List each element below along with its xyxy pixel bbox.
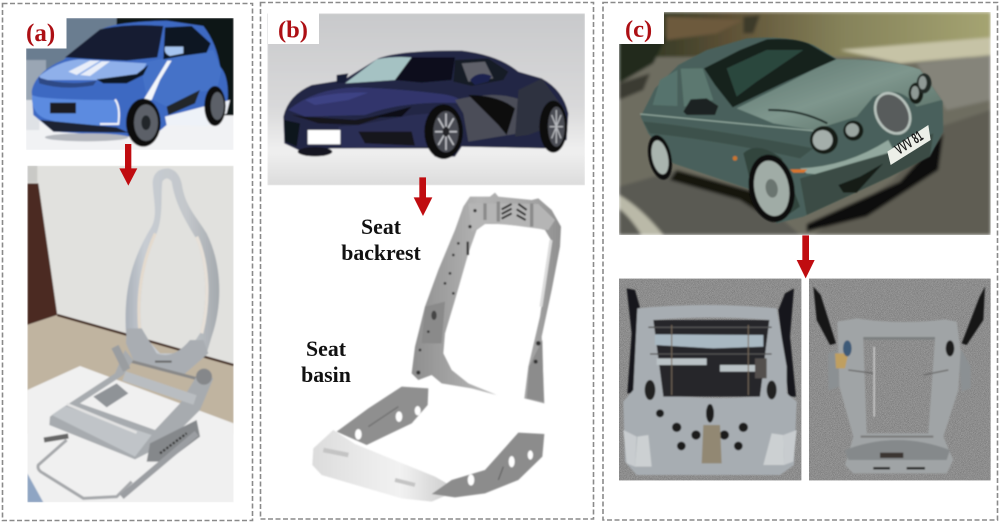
photo: cast seat frame, left view [619,279,801,480]
photo: dark blue sports car [267,13,585,185]
number plate text: VVV 81 [892,128,926,158]
label (b) [268,13,319,44]
label: seat backrest: Seat [361,215,402,239]
label (b): (b) [278,16,308,44]
arrow: car to seat frame (b) [414,177,432,216]
label: seat basin: basin [301,363,351,387]
label: seat basin: Seat [306,337,347,361]
photo: cast seat frame, right view [809,279,991,480]
panel (a): compact electric car and its seat frame [2,4,252,520]
label (c): (c) [625,16,652,43]
label (a): (a) [26,20,55,47]
label: seat backrest: backrest [341,241,421,265]
label (a) [26,18,66,48]
seat basin part [312,387,544,502]
arrow: car to seat frames (c) [797,235,815,278]
panel (b): sports car and seat frame parts [260,2,594,519]
photo: blue electric city car [26,18,234,150]
photo: green sedan on road [619,12,991,235]
label (c) [619,12,664,44]
photo: cast seat frame on white table [27,166,234,502]
panel (c): sedan and cast seat frame photographs [603,2,998,520]
arrow: car to seat frame (a) [119,144,137,186]
seat backrest part [412,193,561,403]
